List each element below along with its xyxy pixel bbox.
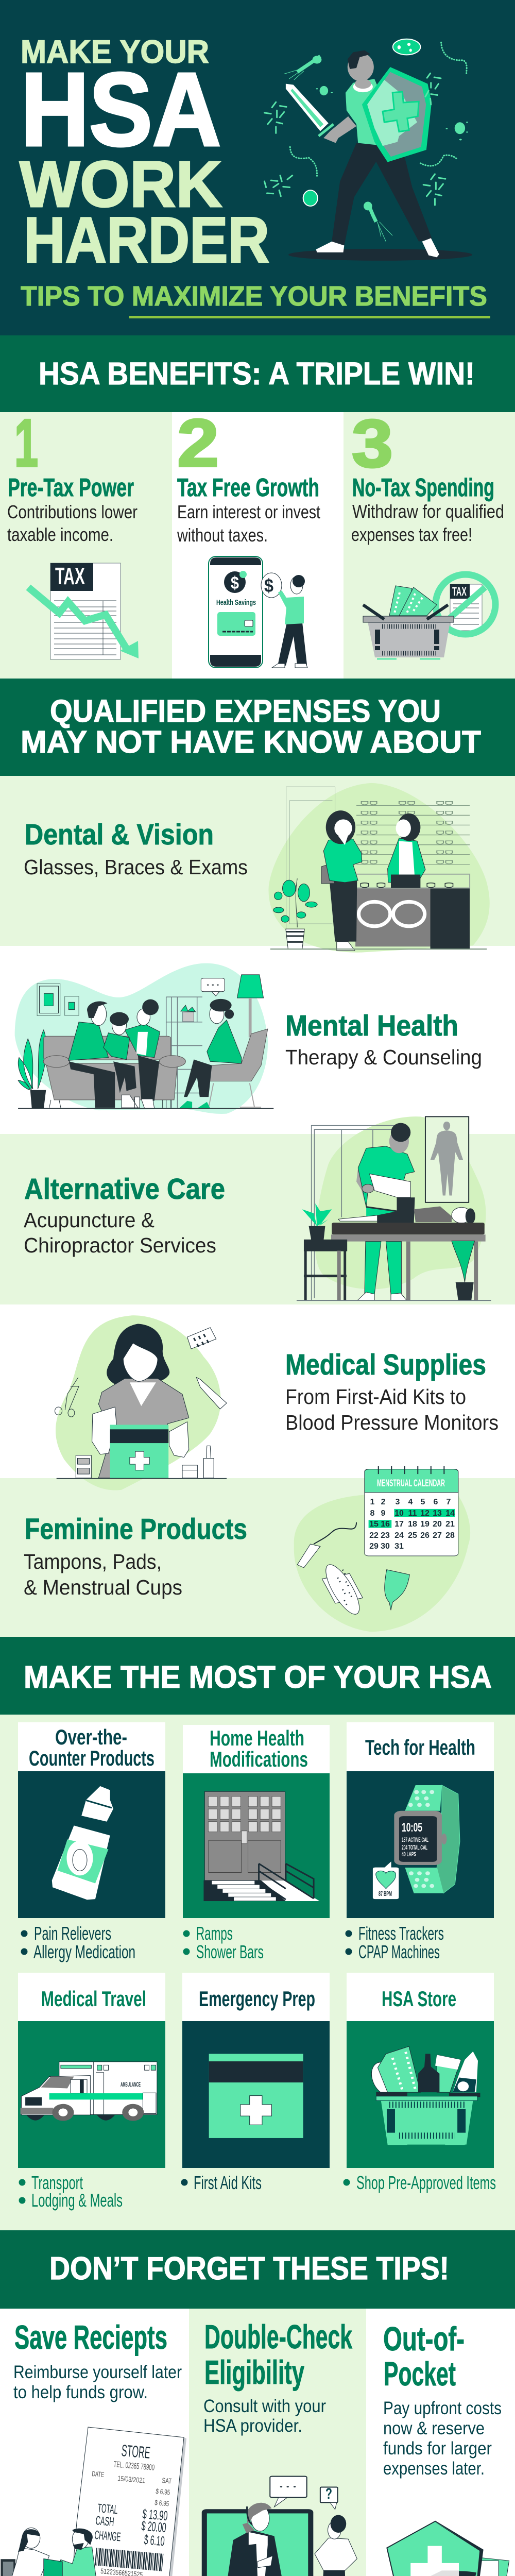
panel: dental and vision	[0, 776, 515, 953]
feminine section background	[0, 1478, 515, 1637]
heading and text: Feminine Products	[25, 1513, 247, 1546]
icon: first aid kit	[209, 2054, 303, 2138]
panel: double-check eligibility	[189, 2309, 366, 2576]
calendar text: 21	[445, 1520, 455, 1529]
calendar text: 11	[408, 1509, 417, 1518]
watch screen text: 40 LAPS	[402, 1851, 416, 1858]
bullets: Shower Bars	[196, 1941, 264, 1962]
illustration: receipt: TEL. 02365 78900	[113, 2460, 155, 2472]
panel: pre-tax power	[0, 405, 172, 679]
title: HARDER	[24, 205, 269, 276]
heading and text: Dental & Vision	[25, 818, 214, 851]
heading and text: Out-of-	[383, 2320, 465, 2358]
heading and text: Pre-Tax Power	[8, 474, 134, 502]
heading and text	[24, 1173, 225, 1257]
calendar text: 23	[381, 1531, 390, 1540]
watch screen text: 87 BPM	[379, 1890, 392, 1897]
calendar text: 2	[381, 1498, 386, 1506]
number 1: 1	[14, 405, 38, 481]
bullets	[21, 1923, 135, 1962]
illustration: receipt: TOTAL	[97, 2501, 118, 2517]
illustration: receipt: DATE	[92, 2469, 105, 2479]
calendar text: 17	[394, 1520, 404, 1529]
heading and text: From First-Aid Kits to	[285, 1385, 466, 1409]
heading and text	[351, 474, 504, 545]
heading and text	[24, 1513, 247, 1599]
card: over-the-counter products: Over-the-	[55, 1725, 127, 1749]
calendar text: 4	[408, 1498, 413, 1506]
calendar text: 29	[369, 1542, 379, 1551]
heading band: don't forget these tips: DON’T FORGET THESE TIPS!	[49, 2251, 449, 2286]
calendar text: 7	[447, 1498, 451, 1506]
illustration: cashier and shopper	[1, 2528, 98, 2576]
title: MAKE YOUR	[21, 34, 209, 70]
panel: HSA ideas grid	[0, 1715, 515, 2230]
icon: medicine bottle	[52, 1786, 113, 1900]
heading and text	[13, 2318, 182, 2402]
calendar text: 28	[445, 1531, 455, 1540]
bullets: Pain Relievers	[34, 1923, 111, 1944]
calendar text: 14	[445, 1509, 455, 1518]
heading band: HSA benefits	[0, 335, 515, 412]
heading and text: Reimburse yourself later	[13, 2362, 182, 2382]
heading and text: Acupuncture &	[24, 1208, 154, 1232]
illustration: receipt: $ 13.90	[142, 2506, 168, 2523]
heading and text	[24, 818, 248, 879]
panel: out-of-pocket	[366, 2309, 515, 2576]
calendar text	[369, 1478, 455, 1551]
illustration: receipt: $ 6.95	[154, 2498, 169, 2507]
bullets: Transport	[31, 2172, 83, 2193]
number 2: 2	[177, 405, 219, 481]
watch screen text: 10:05	[402, 1821, 422, 1835]
heading and text: expenses later.	[383, 2459, 485, 2479]
illustration: chiropractor with patient	[297, 1116, 491, 1300]
card: HSA store: HSA Store	[382, 1987, 456, 2011]
panel: mental health content	[15, 963, 482, 1114]
calendar text: 26	[420, 1531, 430, 1540]
bullets: Fitness Trackers	[358, 1923, 444, 1944]
heading and text	[285, 1009, 482, 1069]
icon: tax form with falling arrow	[28, 563, 139, 659]
title	[20, 34, 269, 276]
illustration: video consultation	[202, 2477, 357, 2576]
calendar text: MENSTRUAL CALENDAR	[377, 1478, 445, 1489]
calendar text: 3	[396, 1498, 400, 1506]
heading and text: & Menstrual Cups	[24, 1575, 182, 1599]
illustration: family at therapy	[15, 963, 273, 1114]
panel: save receipts	[0, 2309, 189, 2576]
icon: no tax sign with shopping basket	[363, 574, 495, 659]
card: medical travel: Medical Travel	[41, 1987, 146, 2011]
heading band: make the most of your HSA	[0, 1637, 515, 1715]
heading and text: Tampons, Pads,	[24, 1550, 162, 1573]
illustration: receipt: CASH	[95, 2514, 115, 2529]
heading and text: Chiropractor Services	[24, 1233, 216, 1257]
watch screen text: 187 ACTIVE CAL	[402, 1836, 428, 1843]
icon: tax form with falling arrow: TAX	[55, 563, 85, 589]
illustration: receipt: 15/03/2021	[117, 2474, 146, 2485]
panel: feminine products	[24, 1466, 470, 1632]
illustration: receipt: $ 6.95	[156, 2487, 170, 2496]
calendar text: 27	[433, 1531, 442, 1540]
title: WORK	[20, 148, 222, 221]
calendar text: 6	[434, 1498, 438, 1506]
heading and text: Glasses, Braces & Exams	[24, 855, 248, 879]
heading and text: Pocket	[384, 2355, 456, 2393]
calendar text: 31	[394, 1542, 404, 1551]
card: over-the-counter products: Counter Products	[29, 1746, 154, 1770]
icon: doors with stairs and ramp	[203, 1791, 320, 1901]
heading band: make the most of your HSA: MAKE THE MOST OF YOUR HSA	[24, 1659, 492, 1694]
bullets: CPAP Machines	[358, 1941, 440, 1962]
title: HSA	[21, 51, 221, 167]
card: home health modifications: Home Health	[210, 1726, 304, 1750]
calendar text: 5	[421, 1498, 425, 1506]
card: tech for health	[345, 1722, 494, 1962]
calendar text: 8	[370, 1509, 375, 1518]
heading and text	[7, 474, 138, 545]
bullets	[19, 2172, 123, 2211]
illustration: woman with first aid kit	[55, 1315, 227, 1490]
heading and text: Tax Free Growth	[177, 474, 319, 502]
heading and text: Contributions lower	[7, 501, 138, 522]
heading band: qualified expenses: MAY NOT HAVE KNOW ABOUT	[21, 724, 481, 759]
icon: ambulance	[21, 2062, 157, 2121]
card: over-the-counter products	[18, 1722, 165, 1962]
calendar text: 12	[420, 1509, 430, 1518]
calendar text: 22	[369, 1531, 379, 1540]
illustration: receipt	[72, 2427, 186, 2576]
heading band: don't forget these tips	[0, 2230, 515, 2309]
calendar text: 18	[408, 1520, 417, 1529]
heading and text: taxable income.	[7, 524, 113, 545]
heading and text	[383, 2320, 502, 2479]
panel: mental health background	[0, 946, 515, 1134]
heading and text: Consult with your	[203, 2396, 326, 2416]
icon: fitness watch	[373, 1785, 460, 1899]
heading and text	[285, 1348, 499, 1434]
icon: no tax sign with shopping basket: TAX	[452, 585, 467, 599]
illustration: eyewear shop	[269, 783, 490, 953]
illustration: receipt: STORE	[121, 2441, 151, 2462]
calendar text: 24	[394, 1531, 404, 1540]
illustration: receipt: SAT	[162, 2476, 172, 2485]
bullets: Allergy Medication	[33, 1941, 135, 1962]
icon: phone with health savings app and person: Health Savings	[216, 598, 256, 607]
heading and text: now & reserve	[383, 2418, 485, 2438]
heading and text: without taxes.	[177, 524, 268, 546]
bullet: First Aid Kits	[194, 2172, 262, 2193]
illustration: receipt: CHANGE	[94, 2528, 122, 2544]
heading and text: to help funds grow.	[13, 2382, 148, 2402]
bullets	[183, 1923, 264, 1962]
heading and text: HSA provider.	[203, 2416, 302, 2436]
illustration: receipt: $ 20.00	[141, 2518, 167, 2535]
calendar text: 30	[381, 1542, 390, 1551]
calendar text: 10	[394, 1509, 404, 1518]
heading and text: Save Reciepts	[14, 2318, 167, 2356]
calendar text: 13	[433, 1509, 442, 1518]
bullet	[181, 2172, 262, 2193]
card: medical travel	[18, 1973, 165, 2211]
icon: basket of medical items	[368, 2046, 480, 2145]
card: HSA store	[343, 1973, 496, 2193]
calendar text: 1	[370, 1498, 375, 1506]
calendar text: 19	[420, 1520, 430, 1529]
card: home health modifications: Modifications	[210, 1747, 308, 1771]
panel: tax free growth	[172, 405, 344, 679]
heading and text: Mental Health	[285, 1009, 458, 1042]
illustration: shield with money	[387, 2521, 509, 2576]
heading and text: Therapy & Counseling	[285, 1045, 482, 1069]
heading and text	[203, 2318, 353, 2436]
bullets: Lodging & Meals	[31, 2190, 123, 2211]
heading and text: Earn interest or invest	[177, 501, 320, 522]
watch screen text	[379, 1821, 428, 1897]
panel: medical supplies	[0, 1304, 515, 1637]
bullets: Ramps	[196, 1923, 233, 1944]
illustration: man with sword and shield fighting germs	[264, 39, 472, 261]
heading band: qualified expenses	[0, 679, 515, 776]
subtitle: TIPS TO MAXIMIZE YOUR BENEFITS	[21, 281, 487, 312]
number 3: 3	[352, 405, 393, 481]
card: home health modifications	[183, 1725, 330, 1962]
heading and text: Double-Check	[204, 2318, 353, 2355]
calendar text: 25	[408, 1531, 417, 1540]
calendar text: 16	[381, 1520, 390, 1529]
illustration: receipt: $ 6.10	[143, 2532, 165, 2549]
question mark: ?	[325, 2485, 332, 2502]
calendar text: 9	[381, 1509, 386, 1518]
icon: phone with health savings app and person: $	[264, 575, 273, 596]
heading band: HSA benefits: HSA BENEFITS: A TRIPLE WIN!	[39, 356, 475, 391]
bullets	[345, 1923, 444, 1962]
ambulance label: AMBULANCE	[121, 2081, 141, 2088]
heading and text: expenses tax free!	[351, 524, 472, 545]
icon: phone with health savings app and person: $	[231, 573, 239, 593]
panel: no-tax spending	[344, 405, 515, 679]
calendar text: 15	[369, 1520, 379, 1529]
heading and text: Blood Pressure Monitors	[285, 1411, 499, 1434]
heading and text: Alternative Care	[24, 1173, 225, 1206]
panel: alternative care	[0, 1116, 515, 1304]
watch screen text: 204 TOTAL CAL	[402, 1844, 427, 1851]
heading and text: funds for larger	[383, 2438, 492, 2459]
card: emergency prep: Emergency Prep	[199, 1987, 315, 2011]
heading band: qualified expenses: QUALIFIED EXPENSES YOU	[50, 693, 441, 728]
heading and text	[177, 474, 320, 546]
card: emergency prep	[181, 1973, 330, 2193]
heading and text: Eligibility	[204, 2353, 304, 2391]
calendar text: 20	[433, 1520, 442, 1529]
icon: phone with health savings app and person	[209, 556, 307, 668]
panel: hero header	[0, 0, 515, 335]
illustration: menstrual products background and shapes	[294, 1466, 470, 1632]
